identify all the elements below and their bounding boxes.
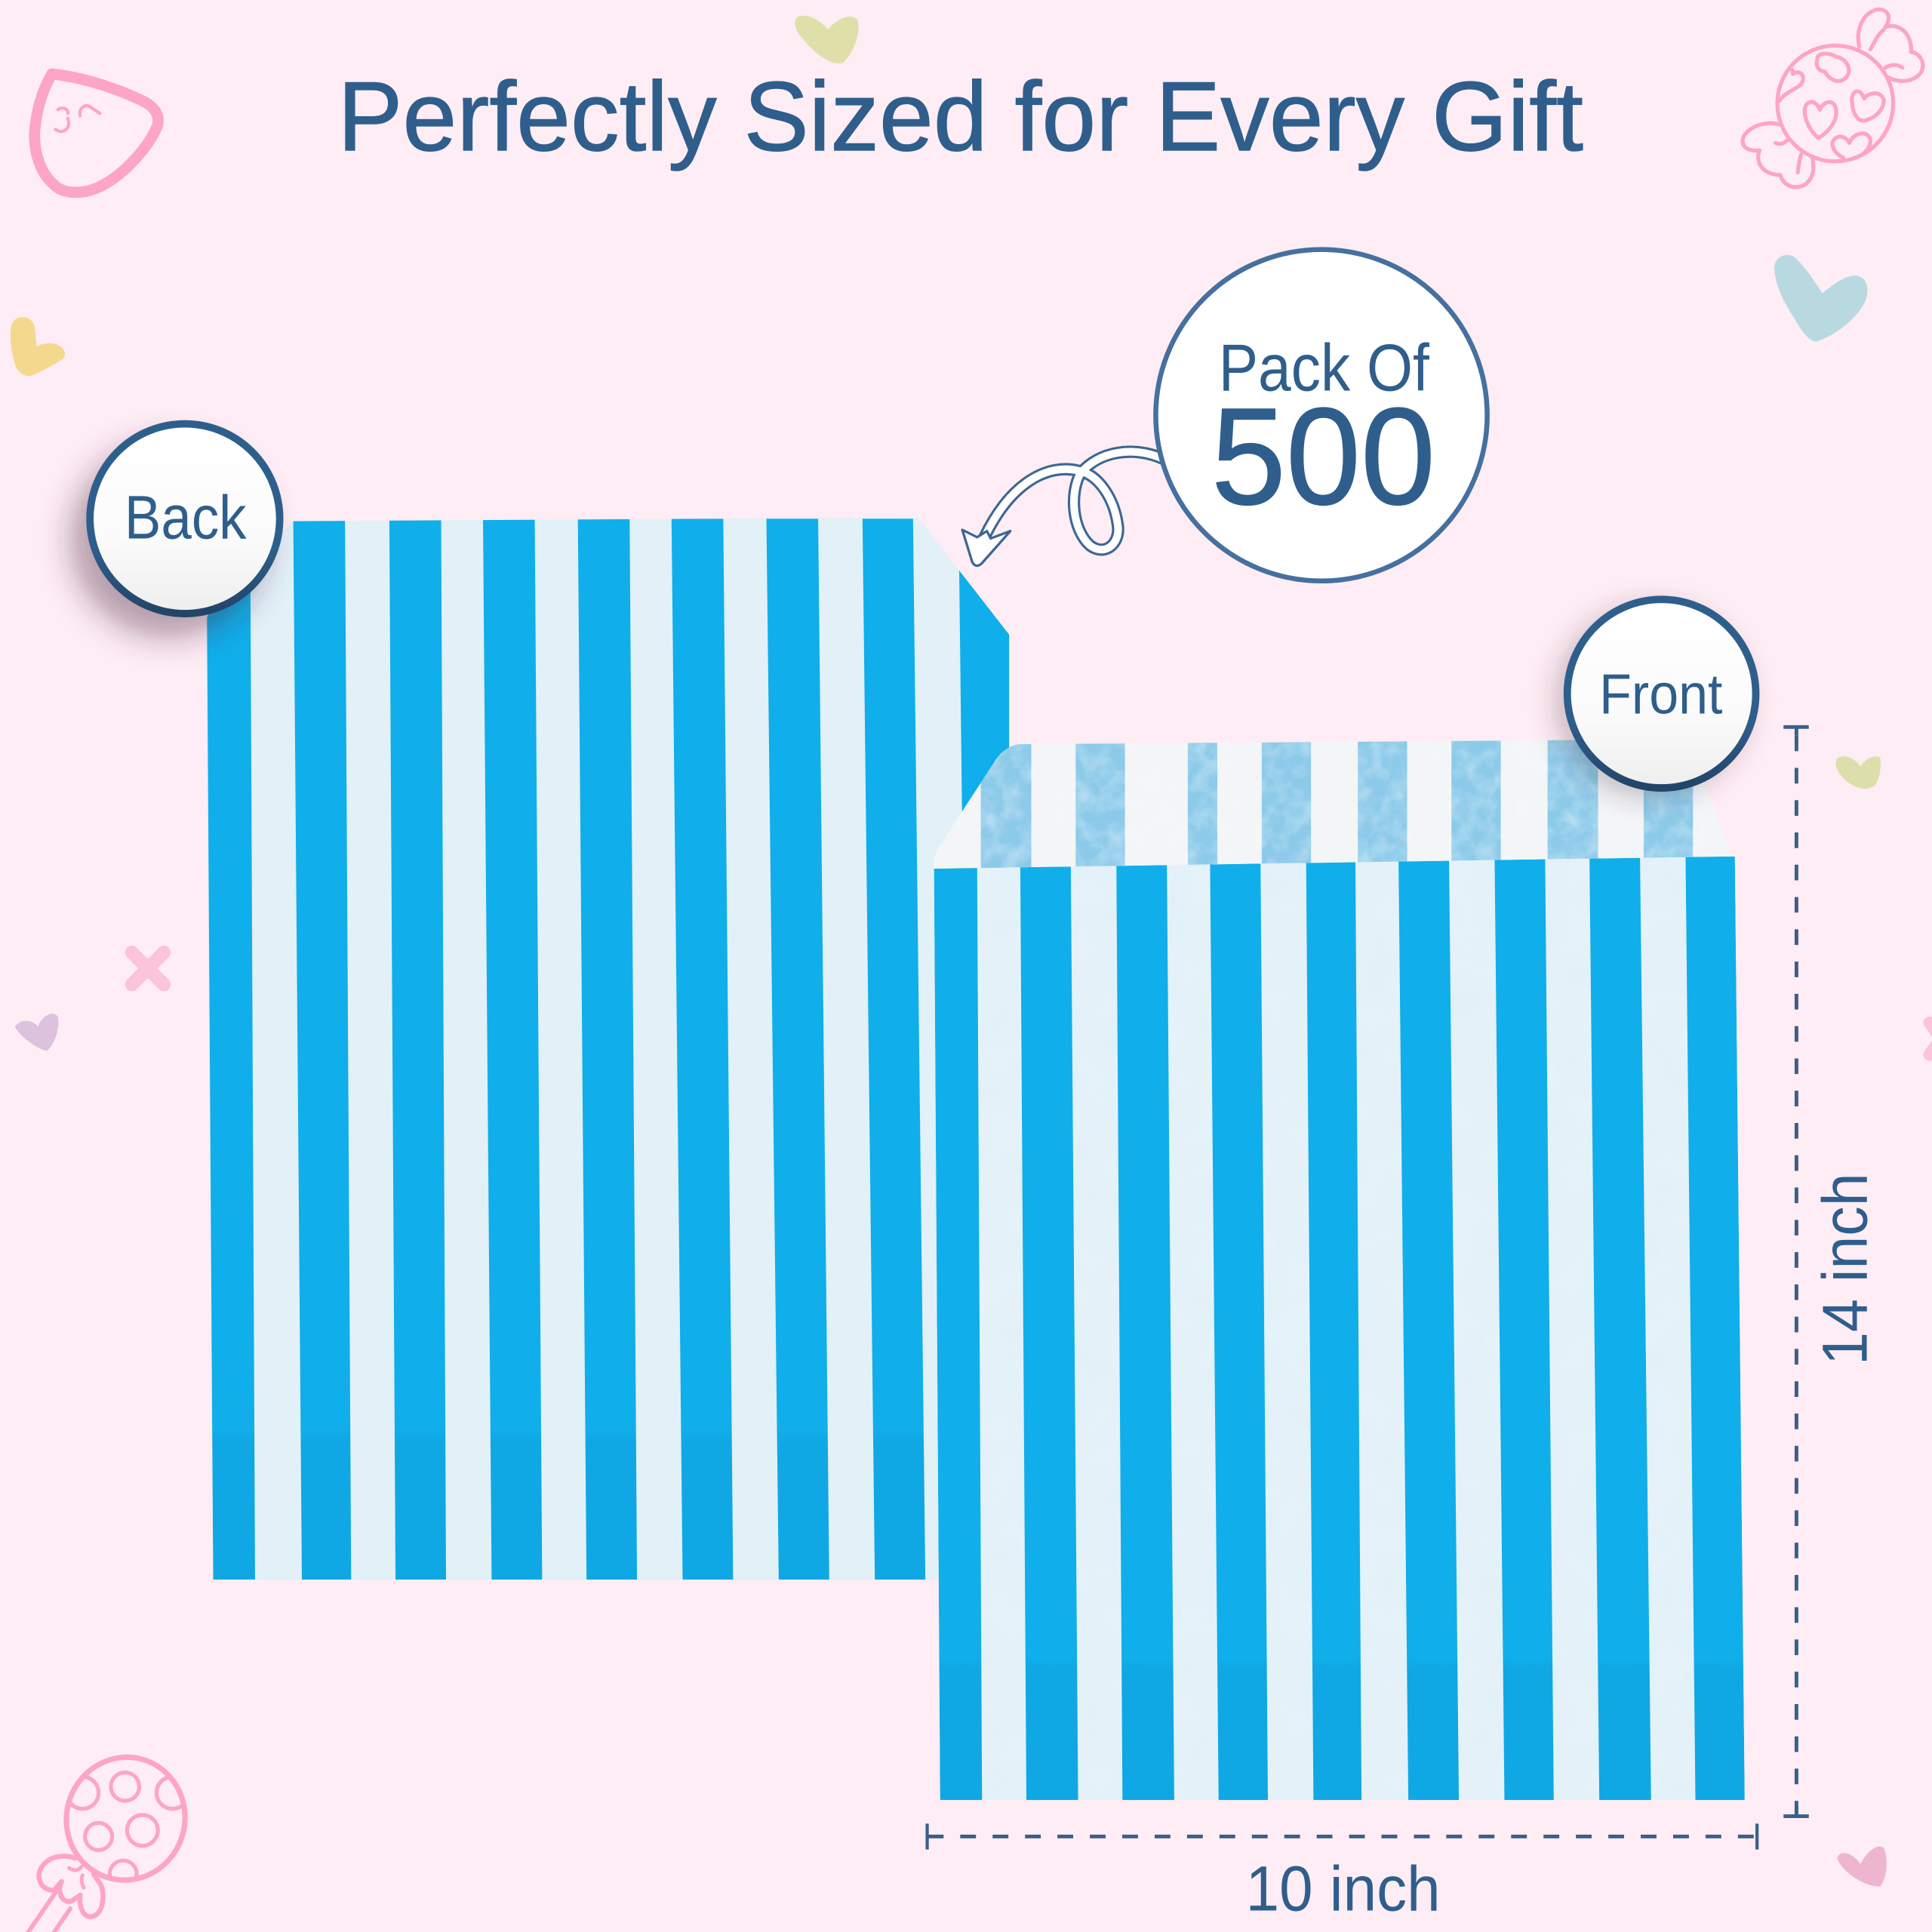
callout: pack of 500 xyxy=(1155,250,1487,581)
callout: pack of 500: Pack Of xyxy=(1219,331,1429,405)
dimension: width 10 inch xyxy=(928,1823,1757,1924)
icon: pink heart bottom right xyxy=(1837,1847,1887,1887)
icon: strawberry outline xyxy=(35,74,158,192)
icon: wrapped candy xyxy=(1743,10,1923,187)
icon: yellow heart xyxy=(11,317,65,376)
dimension: height 14 inch xyxy=(1783,727,1880,1817)
dimension: width 10 inch: 10 inch xyxy=(1246,1852,1441,1924)
callout: pack of 500: 500 xyxy=(1211,379,1435,534)
front bag paper xyxy=(924,851,1762,1811)
callout: front badge xyxy=(1567,599,1756,788)
back bag blue stripes xyxy=(206,518,1021,1580)
icon: lollipop xyxy=(26,1754,188,1932)
icon: purple heart xyxy=(15,1014,58,1051)
icon: pink cross at right edge xyxy=(1930,1023,1932,1055)
icon: pink cross xyxy=(132,952,164,984)
dimension: height 14 inch: 14 inch xyxy=(1808,1173,1880,1365)
panel: front bag xyxy=(924,733,1762,1811)
front bag blue stripes xyxy=(934,857,1745,1800)
title: Perfectly Sized for Every Gift xyxy=(337,61,1583,171)
icon: green heart top xyxy=(795,16,858,63)
icon: blue heart xyxy=(1774,255,1867,341)
callout: front badge: Front xyxy=(1599,662,1723,725)
callout: back badge xyxy=(90,424,280,614)
callout: back badge: Back xyxy=(125,483,247,552)
panel: back bag xyxy=(197,505,1035,1589)
icon: green heart right xyxy=(1835,756,1881,789)
back bag paper xyxy=(205,518,962,1580)
front bag flap xyxy=(934,740,1734,869)
arrow: from pack badge to back bag xyxy=(962,452,1162,566)
